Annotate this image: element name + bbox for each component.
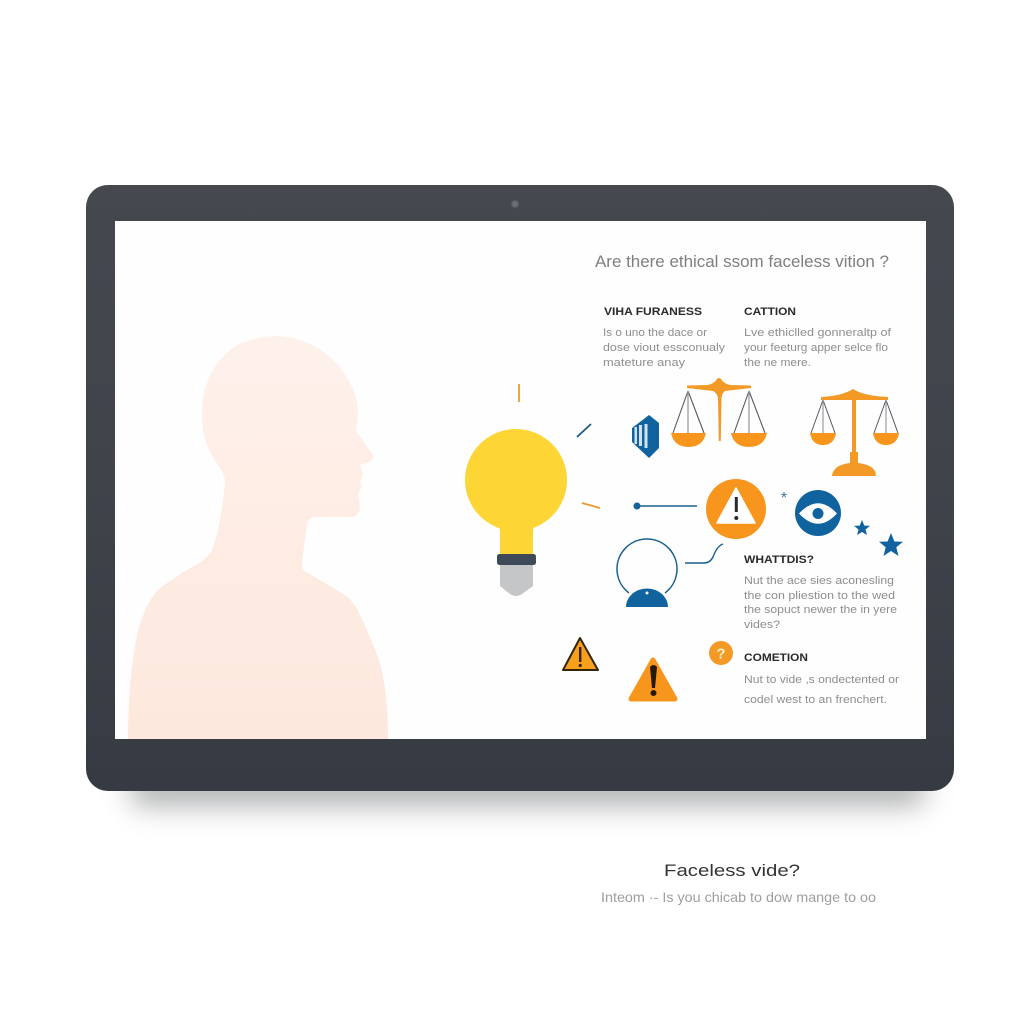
icon: question mark: ? <box>716 646 726 662</box>
icon: small star <box>854 520 870 535</box>
text block: what is: the con pliestion to the wed <box>744 590 895 602</box>
icon: warning circle <box>706 479 766 539</box>
light rays <box>519 384 600 508</box>
text block: cattion: the ne mere. <box>744 357 811 369</box>
text block: cattion: CATTION <box>744 306 796 318</box>
text block: viha furaness: dose viout essconualy <box>603 342 726 354</box>
text block: viha furaness: VIHA FURANESS <box>604 306 702 318</box>
screen <box>115 221 926 739</box>
heading: Are there ethical ssom faceless vition ? <box>595 253 889 271</box>
text block: what is: WHATTDIS? <box>744 554 814 566</box>
icon: scales left <box>671 378 767 447</box>
text block: viha furaness <box>603 306 726 369</box>
connector line <box>634 502 697 510</box>
icon: blue hexagon <box>632 415 659 458</box>
text block: cometion: COMETION <box>744 652 808 664</box>
text block: viha furaness: Is o uno the dace or <box>603 327 707 339</box>
footer heading: Faceless vide? <box>664 861 800 880</box>
icon: eye <box>795 490 841 536</box>
icon: light bulb <box>465 429 567 596</box>
icon: scales right <box>810 389 899 476</box>
text block: cometion <box>744 652 899 706</box>
icon: asterisk: * <box>781 490 787 507</box>
icon: warning triangle outlined <box>563 638 598 670</box>
silhouette of a person in profile <box>128 336 388 739</box>
text block: what is: Nut the ace sies aconesling <box>744 575 894 587</box>
tablet device <box>86 185 954 806</box>
text block: cattion: Lve ethiclled gonneraltp of <box>744 327 892 339</box>
text block: cometion: Nut to vide ,s ondectented or <box>744 674 899 686</box>
device shadow <box>130 770 925 806</box>
text block: what is <box>744 554 897 631</box>
text block: cometion: codel west to an frenchert. <box>744 694 887 706</box>
text block: what is: vides? <box>744 619 780 631</box>
footer text: Inteom ·- Is you chicab to dow mange to oo <box>601 889 876 905</box>
tablet frame <box>86 185 954 791</box>
text block: cattion <box>744 306 892 369</box>
icon: large star <box>879 533 903 556</box>
connector curve <box>685 544 723 563</box>
text block: cattion: your feeturg apper selce flo <box>744 342 888 354</box>
icon: warning triangle solid <box>631 660 675 699</box>
text block: viha furaness: mateture anay <box>603 357 686 369</box>
text block: what is: the sopuct newer the in yere <box>744 604 897 616</box>
icon: question mark <box>709 641 733 665</box>
icon: circle with dome <box>617 539 677 607</box>
camera <box>512 200 518 208</box>
